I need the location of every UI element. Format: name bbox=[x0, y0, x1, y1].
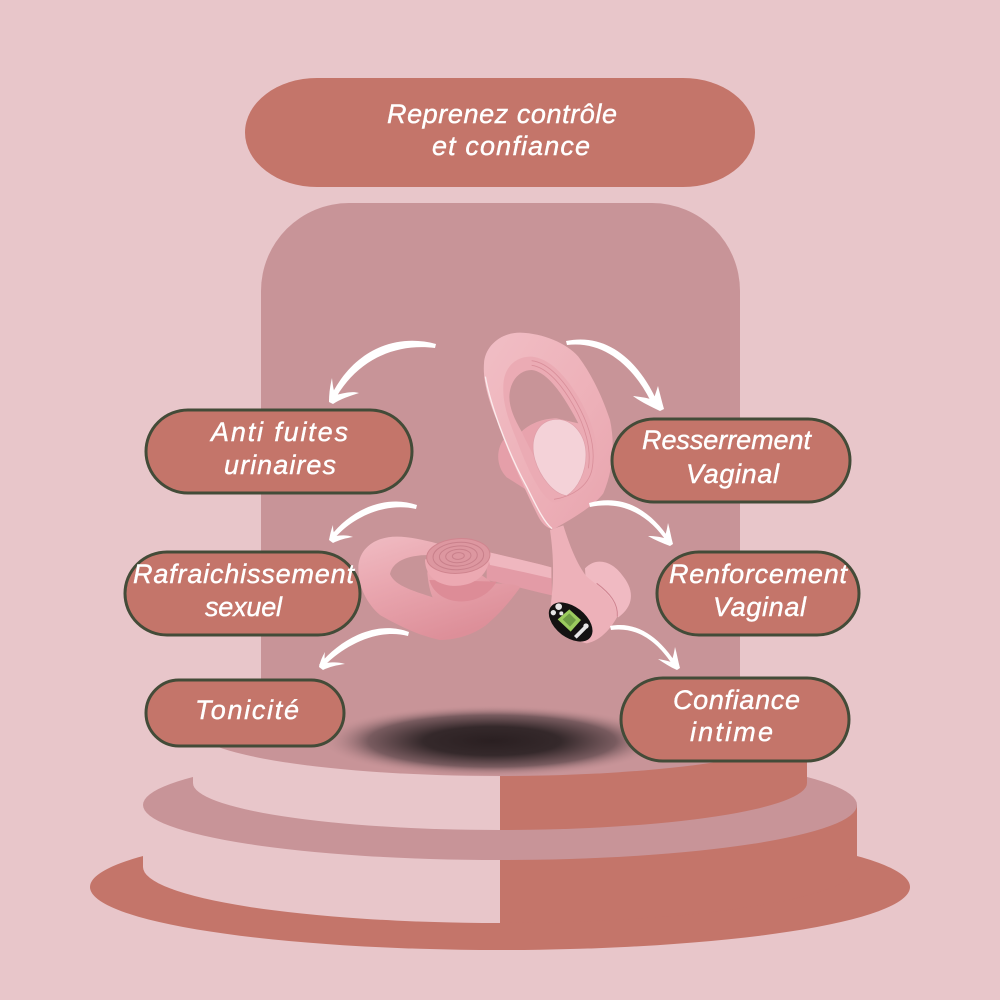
joint seam bbox=[597, 583, 617, 617]
podium bbox=[90, 680, 910, 950]
pill: tonicité bbox=[146, 680, 344, 746]
product: pelvic trainer bbox=[358, 333, 631, 649]
lower arm bbox=[487, 552, 552, 595]
upper tier right side bbox=[500, 728, 807, 830]
pill: confiance intime: Confiance bbox=[673, 685, 800, 715]
pill: rafraichissement sexuel: Rafraichissement bbox=[133, 559, 355, 589]
pill: anti fuites urinaires: urinaires bbox=[224, 450, 336, 480]
display bbox=[542, 595, 600, 649]
title line 1: Reprenez contrôle bbox=[387, 99, 617, 129]
pill: resserrement vaginal: Resserrement bbox=[642, 425, 812, 455]
pill: rafraichissement sexuel: sexuel bbox=[205, 592, 283, 622]
upper ring bbox=[484, 333, 613, 529]
arrow: to rafraichissement bbox=[329, 501, 417, 543]
ring edge highlight bbox=[485, 377, 552, 529]
title line 2: et confiance bbox=[432, 131, 590, 161]
pill: tonicité: Tonicité bbox=[195, 695, 299, 725]
arch backdrop bbox=[261, 203, 740, 730]
lower tier left side bbox=[143, 805, 500, 923]
pill: anti fuites urinaires: Anti fuites bbox=[209, 417, 348, 447]
back cylinder bbox=[498, 440, 527, 490]
ring opening bbox=[509, 370, 578, 432]
pill: resserrement vaginal: Vaginal bbox=[686, 459, 780, 489]
lower tier right side bbox=[500, 805, 857, 923]
lower arm highlight bbox=[487, 552, 551, 578]
lower ring bbox=[358, 537, 520, 640]
display digits bbox=[563, 613, 576, 627]
arrow: to anti fuites bbox=[329, 341, 436, 404]
podium base ellipse bbox=[90, 824, 910, 950]
ring recess bbox=[503, 357, 597, 503]
pill: confiance intime bbox=[621, 678, 849, 761]
display key icon bbox=[574, 623, 589, 639]
platform shadow bbox=[320, 705, 664, 777]
coil base bbox=[425, 552, 490, 586]
pill: anti fuites urinaires bbox=[146, 410, 412, 493]
arrow: to tonicité bbox=[319, 628, 409, 670]
lower ring opening bbox=[390, 555, 433, 597]
pill: renforcement vaginal bbox=[657, 552, 859, 635]
arrow: to renforcement bbox=[589, 500, 673, 546]
ring ridges bbox=[532, 361, 593, 499]
display icon bbox=[551, 603, 563, 615]
pill: confiance intime: intime bbox=[690, 717, 773, 747]
display screen bbox=[558, 609, 581, 632]
lower tier top bbox=[143, 750, 857, 860]
coiled pad bbox=[426, 536, 491, 575]
disc rim bbox=[522, 419, 567, 490]
upper tier top bbox=[193, 680, 807, 776]
pill: renforcement vaginal: Renforcement bbox=[669, 559, 848, 589]
lower cylinder bbox=[429, 580, 497, 601]
round pad bbox=[533, 419, 586, 496]
upper tier left side bbox=[193, 728, 500, 830]
arrow: to resserrement bbox=[566, 340, 664, 411]
main arm bbox=[549, 525, 617, 643]
title pill bbox=[245, 78, 755, 187]
pill: resserrement vaginal bbox=[612, 419, 850, 502]
arrow: to confiance bbox=[610, 625, 680, 670]
pill: rafraichissement sexuel bbox=[125, 552, 360, 635]
joint cylinder bbox=[585, 562, 631, 617]
pill: renforcement vaginal: Vaginal bbox=[713, 592, 807, 622]
